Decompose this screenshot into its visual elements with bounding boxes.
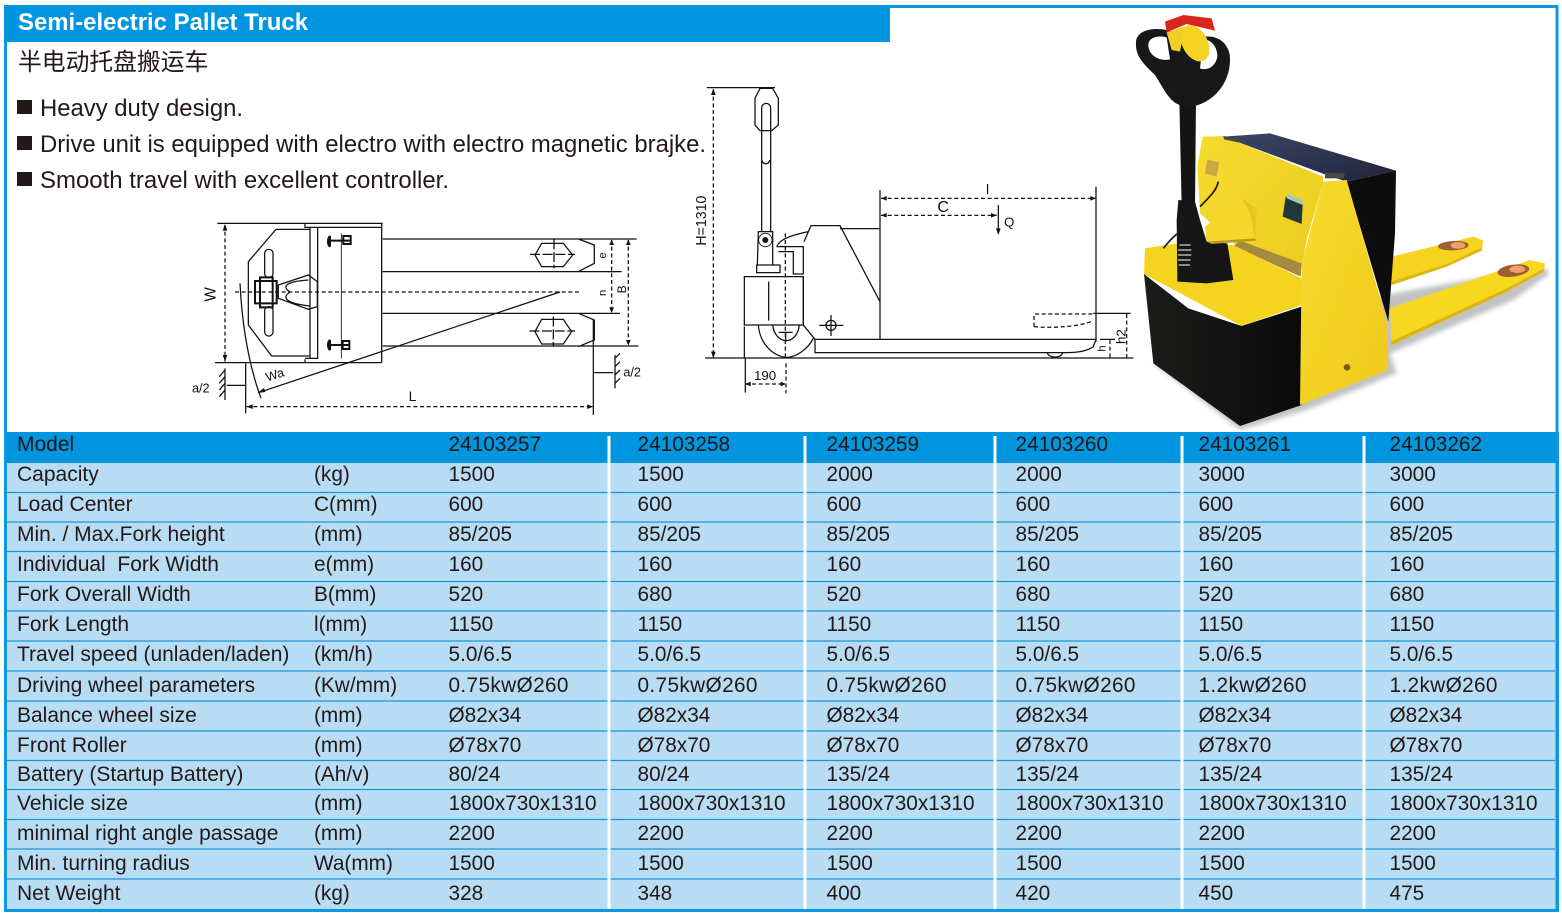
row: model: 24103260 <box>1016 433 1108 456</box>
handle <box>1136 29 1230 107</box>
row: driving wheel: 1.2kwØ260 <box>1390 674 1498 697</box>
row: front roller: Ø78x70 <box>1390 734 1462 757</box>
row: front roller: Ø78x70 <box>1198 734 1271 757</box>
row: battery: 135/24 <box>826 763 890 786</box>
row: net weight: 400 <box>826 882 861 905</box>
row: balance wheel: Ø82x34 <box>1390 704 1462 727</box>
row: front roller: Ø78x70 <box>1016 734 1088 757</box>
title: Semi-electric Pallet Truck <box>18 9 309 36</box>
row: fork height: 85/205 <box>1198 523 1262 546</box>
row: battery: 135/24 <box>1390 763 1453 786</box>
row: model: Model <box>17 433 74 456</box>
row: right angle passage: 2200 <box>638 822 684 845</box>
plan view technical drawing: Wa <box>264 365 287 385</box>
row: turning radius: Min. turning radius <box>17 852 190 875</box>
load center symbol <box>826 320 836 330</box>
row: travel speed: 5.0/6.5 <box>826 643 890 666</box>
bolts <box>328 236 351 247</box>
row: travel speed: 5.0/6.5 <box>1390 643 1453 666</box>
row: right angle passage: (mm) <box>314 822 362 845</box>
row: front roller: Front Roller <box>17 734 127 757</box>
row: fork overall width: Fork Overall Width <box>17 583 191 606</box>
plan view technical drawing: a/2 <box>623 366 641 380</box>
row: balance wheel: Ø82x34 <box>1016 704 1088 727</box>
drive wheel <box>758 325 813 357</box>
deck plate <box>1144 243 1302 326</box>
row: fork overall width: 520 <box>826 583 861 606</box>
row: right angle passage: 2200 <box>1390 822 1436 845</box>
row: load center: 600 <box>826 493 861 516</box>
row: battery: (Ah/v) <box>314 763 369 786</box>
row: driving wheel: (Kw/mm) <box>314 674 397 697</box>
ground shadow <box>1153 267 1550 430</box>
row: turning radius: 1500 <box>448 852 495 875</box>
row: driving wheel: Driving wheel parameters <box>17 674 255 697</box>
row: balance wheel: (mm) <box>314 704 362 727</box>
row: fork height: 85/205 <box>1016 523 1079 546</box>
row: capacity: 1500 <box>448 463 495 486</box>
side view technical drawing: h2 <box>1114 329 1129 344</box>
row: travel speed: 5.0/6.5 <box>1198 643 1262 666</box>
row: net weight: 475 <box>1390 882 1424 905</box>
motor assembly <box>1177 200 1233 283</box>
row: model: 24103261 <box>1198 433 1291 456</box>
row: net weight: 348 <box>638 882 672 905</box>
row: driving wheel: 1.2kwØ260 <box>1198 674 1306 697</box>
row: fork overall width: 520 <box>1198 583 1233 606</box>
row: fork overall width: 520 <box>448 583 483 606</box>
a/2 markers <box>219 353 620 400</box>
row: individual fork width: 160 <box>638 553 672 576</box>
plan view technical drawing: e <box>597 252 609 259</box>
yellow grips <box>1167 26 1185 52</box>
row: fork overall width: 680 <box>1016 583 1050 606</box>
row: fork length: 1150 <box>448 613 493 636</box>
feature list <box>17 95 706 194</box>
row: right angle passage: minimal right angle passage <box>17 822 278 845</box>
row: capacity: 1500 <box>638 463 684 486</box>
row: battery: 135/24 <box>1016 763 1079 786</box>
row: model: 24103262 <box>1390 433 1482 456</box>
plan view technical drawing: n <box>597 290 609 296</box>
row: right angle passage: 2200 <box>448 822 495 845</box>
row: fork height: 85/205 <box>1390 523 1453 546</box>
raised fork <box>1034 313 1095 327</box>
row: net weight: 420 <box>1016 882 1050 905</box>
row: capacity: 2000 <box>826 463 873 486</box>
row: travel speed: 5.0/6.5 <box>448 643 512 666</box>
side view technical drawing: Q <box>1004 215 1014 230</box>
display <box>1283 197 1303 224</box>
plan view technical drawing: B <box>615 285 629 293</box>
row: balance wheel: Ø82x34 <box>826 704 899 727</box>
row: right angle passage: 2200 <box>1198 822 1245 845</box>
row: turning radius: 1500 <box>638 852 684 875</box>
row: capacity: 2000 <box>1016 463 1062 486</box>
turning radius <box>240 283 560 398</box>
row: travel speed: 5.0/6.5 <box>1016 643 1079 666</box>
bullet 2: Drive unit is equipped with electro with electro magnetic brajke. <box>40 131 706 158</box>
title bar <box>4 5 890 42</box>
handle <box>707 88 778 232</box>
row: turning radius: 1500 <box>1390 852 1436 875</box>
row: capacity: 3000 <box>1198 463 1245 486</box>
row: fork height: 85/205 <box>448 523 512 546</box>
row: battery: 80/24 <box>638 763 690 786</box>
row: front roller: (mm) <box>314 734 362 757</box>
forks <box>383 239 638 347</box>
row: fork height: Min. / Max.Fork height <box>17 523 225 546</box>
row: vehicle size: 1800x730x1310 <box>1198 792 1347 815</box>
row: vehicle size: 1800x730x1310 <box>638 792 786 815</box>
row: battery: 80/24 <box>448 763 501 786</box>
specification table <box>4 432 1559 912</box>
row: travel speed: 5.0/6.5 <box>638 643 701 666</box>
row: net weight: 328 <box>448 882 483 905</box>
row: turning radius: Wa(mm) <box>314 852 393 875</box>
row: load center: C(mm) <box>314 493 378 516</box>
bullet 1: Heavy duty design. <box>40 95 243 122</box>
row: balance wheel: Balance wheel size <box>17 704 197 727</box>
load wheels <box>535 243 573 344</box>
side view technical drawing: H=1310 <box>694 196 710 246</box>
photo: yellow electric pallet truck <box>1136 15 1550 430</box>
row: load center: Load Center <box>17 493 133 516</box>
row: fork length: 1150 <box>1016 613 1060 636</box>
row: fork height: (mm) <box>314 523 362 546</box>
row: fork overall width: 680 <box>638 583 672 606</box>
centre line <box>235 290 580 294</box>
dimension lines <box>713 90 1127 393</box>
drive wheel <box>255 277 277 307</box>
row: load center: 600 <box>1390 493 1424 516</box>
row: front roller: Ø78x70 <box>448 734 521 757</box>
row: net weight: (kg) <box>314 882 350 905</box>
row: vehicle size: 1800x730x1310 <box>448 792 597 815</box>
row: battery: Battery (Startup Battery) <box>17 763 243 786</box>
row: vehicle size: 1800x730x1310 <box>826 792 975 815</box>
row: model: 24103257 <box>448 433 541 456</box>
brown strip <box>1233 241 1302 277</box>
row: fork length: 1150 <box>826 613 871 636</box>
row: driving wheel: 0.75kwØ260 <box>448 674 568 697</box>
row: fork length: 1150 <box>1198 613 1243 636</box>
row: right angle passage: 2200 <box>826 822 873 845</box>
row: capacity: 3000 <box>1390 463 1436 486</box>
red head <box>1165 15 1215 32</box>
row: fork length: 1150 <box>1390 613 1434 636</box>
row: travel speed: (km/h) <box>314 643 373 666</box>
row: front roller: Ø78x70 <box>638 734 710 757</box>
row: right angle passage: 2200 <box>1016 822 1062 845</box>
row: net weight: Net Weight <box>17 882 121 905</box>
row: balance wheel: Ø82x34 <box>638 704 710 727</box>
bullet 3: Smooth travel with excellent controller. <box>40 167 449 194</box>
row: individual fork width: e(mm) <box>314 553 374 576</box>
battery box top <box>1223 133 1396 182</box>
plan view technical drawing: a/2 <box>192 382 210 396</box>
row: fork length: Fork Length <box>17 613 129 636</box>
row: vehicle size: 1800x730x1310 <box>1390 792 1538 815</box>
battery box front <box>1197 136 1323 267</box>
near fork <box>1390 260 1545 345</box>
row: load center: 600 <box>1016 493 1050 516</box>
side view technical drawing: l <box>986 181 989 197</box>
row: travel speed: Travel speed (unladen/laden) <box>17 643 289 666</box>
row: front roller: Ø78x70 <box>826 734 899 757</box>
row: individual fork width: Individual Fork Width <box>17 553 219 576</box>
row: fork height: 85/205 <box>638 523 701 546</box>
row: vehicle size: Vehicle size <box>17 792 128 815</box>
side view technical drawing: h <box>1097 345 1109 352</box>
side panel <box>1300 180 1388 405</box>
row: balance wheel: Ø82x34 <box>448 704 521 727</box>
base black <box>1144 274 1302 426</box>
far fork <box>1392 237 1483 285</box>
row: fork length: l(mm) <box>314 613 367 636</box>
hinges <box>1223 136 1345 178</box>
steering column <box>757 232 780 273</box>
row: individual fork width: 160 <box>1198 553 1233 576</box>
row: individual fork width: 160 <box>1390 553 1424 576</box>
row: fork overall width: 680 <box>1390 583 1424 606</box>
row: individual fork width: 160 <box>448 553 483 576</box>
row: load center: 600 <box>1198 493 1233 516</box>
row: fork overall width: B(mm) <box>314 583 376 606</box>
chassis <box>803 190 880 339</box>
row: driving wheel: 0.75kwØ260 <box>1016 674 1136 697</box>
tiller stem <box>1179 100 1196 207</box>
row: capacity: (kg) <box>314 463 350 486</box>
row: driving wheel: 0.75kwØ260 <box>826 674 946 697</box>
row: load center: 600 <box>448 493 483 516</box>
row: capacity: Capacity <box>17 463 99 486</box>
row: turning radius: 1500 <box>1198 852 1245 875</box>
side view technical drawing: 190 <box>754 368 776 383</box>
row: turning radius: 1500 <box>826 852 873 875</box>
row: model: 24103258 <box>638 433 730 456</box>
side view technical drawing <box>694 88 1133 393</box>
row: fork length: 1150 <box>638 613 682 636</box>
row: vehicle size: (mm) <box>314 792 362 815</box>
row: load center: 600 <box>638 493 672 516</box>
row: vehicle size: 1800x730x1310 <box>1016 792 1164 815</box>
plan view technical drawing <box>192 223 641 415</box>
plan view technical drawing: W <box>202 287 219 302</box>
wiring <box>1163 182 1218 248</box>
row: model: 24103259 <box>826 433 919 456</box>
row: driving wheel: 0.75kwØ260 <box>638 674 758 697</box>
plan view technical drawing: L <box>409 388 417 404</box>
chinese subtitle: 半电动托盘搬运车 <box>18 49 208 76</box>
row: fork height: 85/205 <box>826 523 890 546</box>
side view technical drawing: C <box>937 199 949 216</box>
dimension lines <box>225 225 628 407</box>
row: net weight: 450 <box>1198 882 1233 905</box>
row: individual fork width: 160 <box>1016 553 1050 576</box>
row: balance wheel: Ø82x34 <box>1198 704 1271 727</box>
battery box rear <box>1347 171 1396 322</box>
row: turning radius: 1500 <box>1016 852 1062 875</box>
drive body <box>744 277 803 325</box>
yellow cone <box>1205 198 1257 244</box>
row: individual fork width: 160 <box>826 553 861 576</box>
row: battery: 135/24 <box>1198 763 1262 786</box>
